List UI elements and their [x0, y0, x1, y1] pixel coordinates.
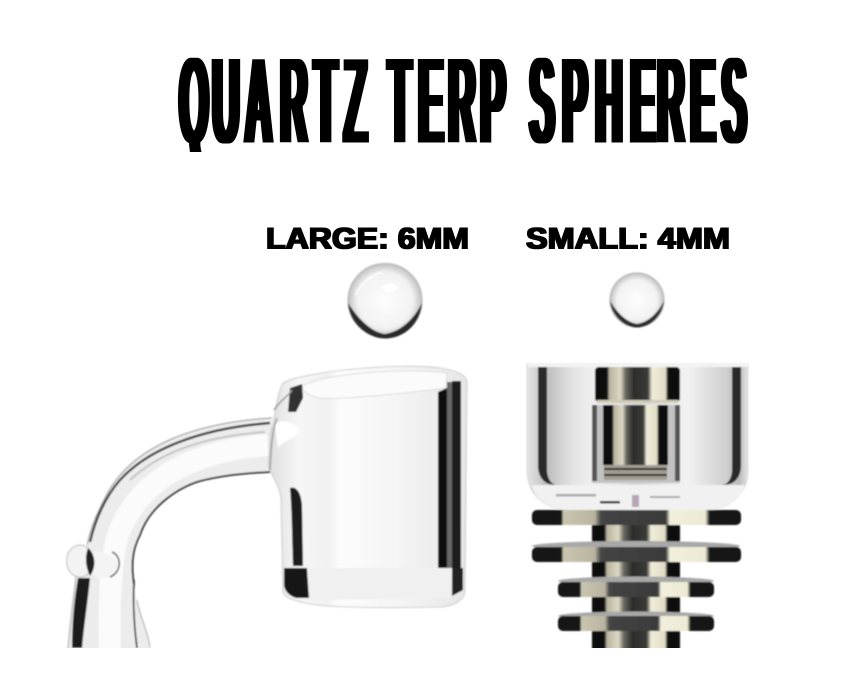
- banger arm: [67, 417, 272, 650]
- label: small 4mm: SMALL: 4MM: [526, 222, 730, 256]
- infographic: quartz terp spheres: [65, 58, 749, 648]
- banger nub: [66, 545, 120, 578]
- quartz banger: [66, 366, 467, 650]
- large sphere: [348, 264, 422, 338]
- banger cup: [268, 366, 467, 608]
- titanium nail with quartz dish: [527, 364, 748, 650]
- label: large 6mm: LARGE: 6MM: [266, 222, 469, 256]
- quartz dish: [527, 364, 748, 510]
- heat-sink fins: [532, 510, 741, 650]
- small sphere: [610, 273, 664, 328]
- inner metal post: [592, 367, 680, 483]
- title: QUARTZ TERP SPHERES: [179, 30, 747, 171]
